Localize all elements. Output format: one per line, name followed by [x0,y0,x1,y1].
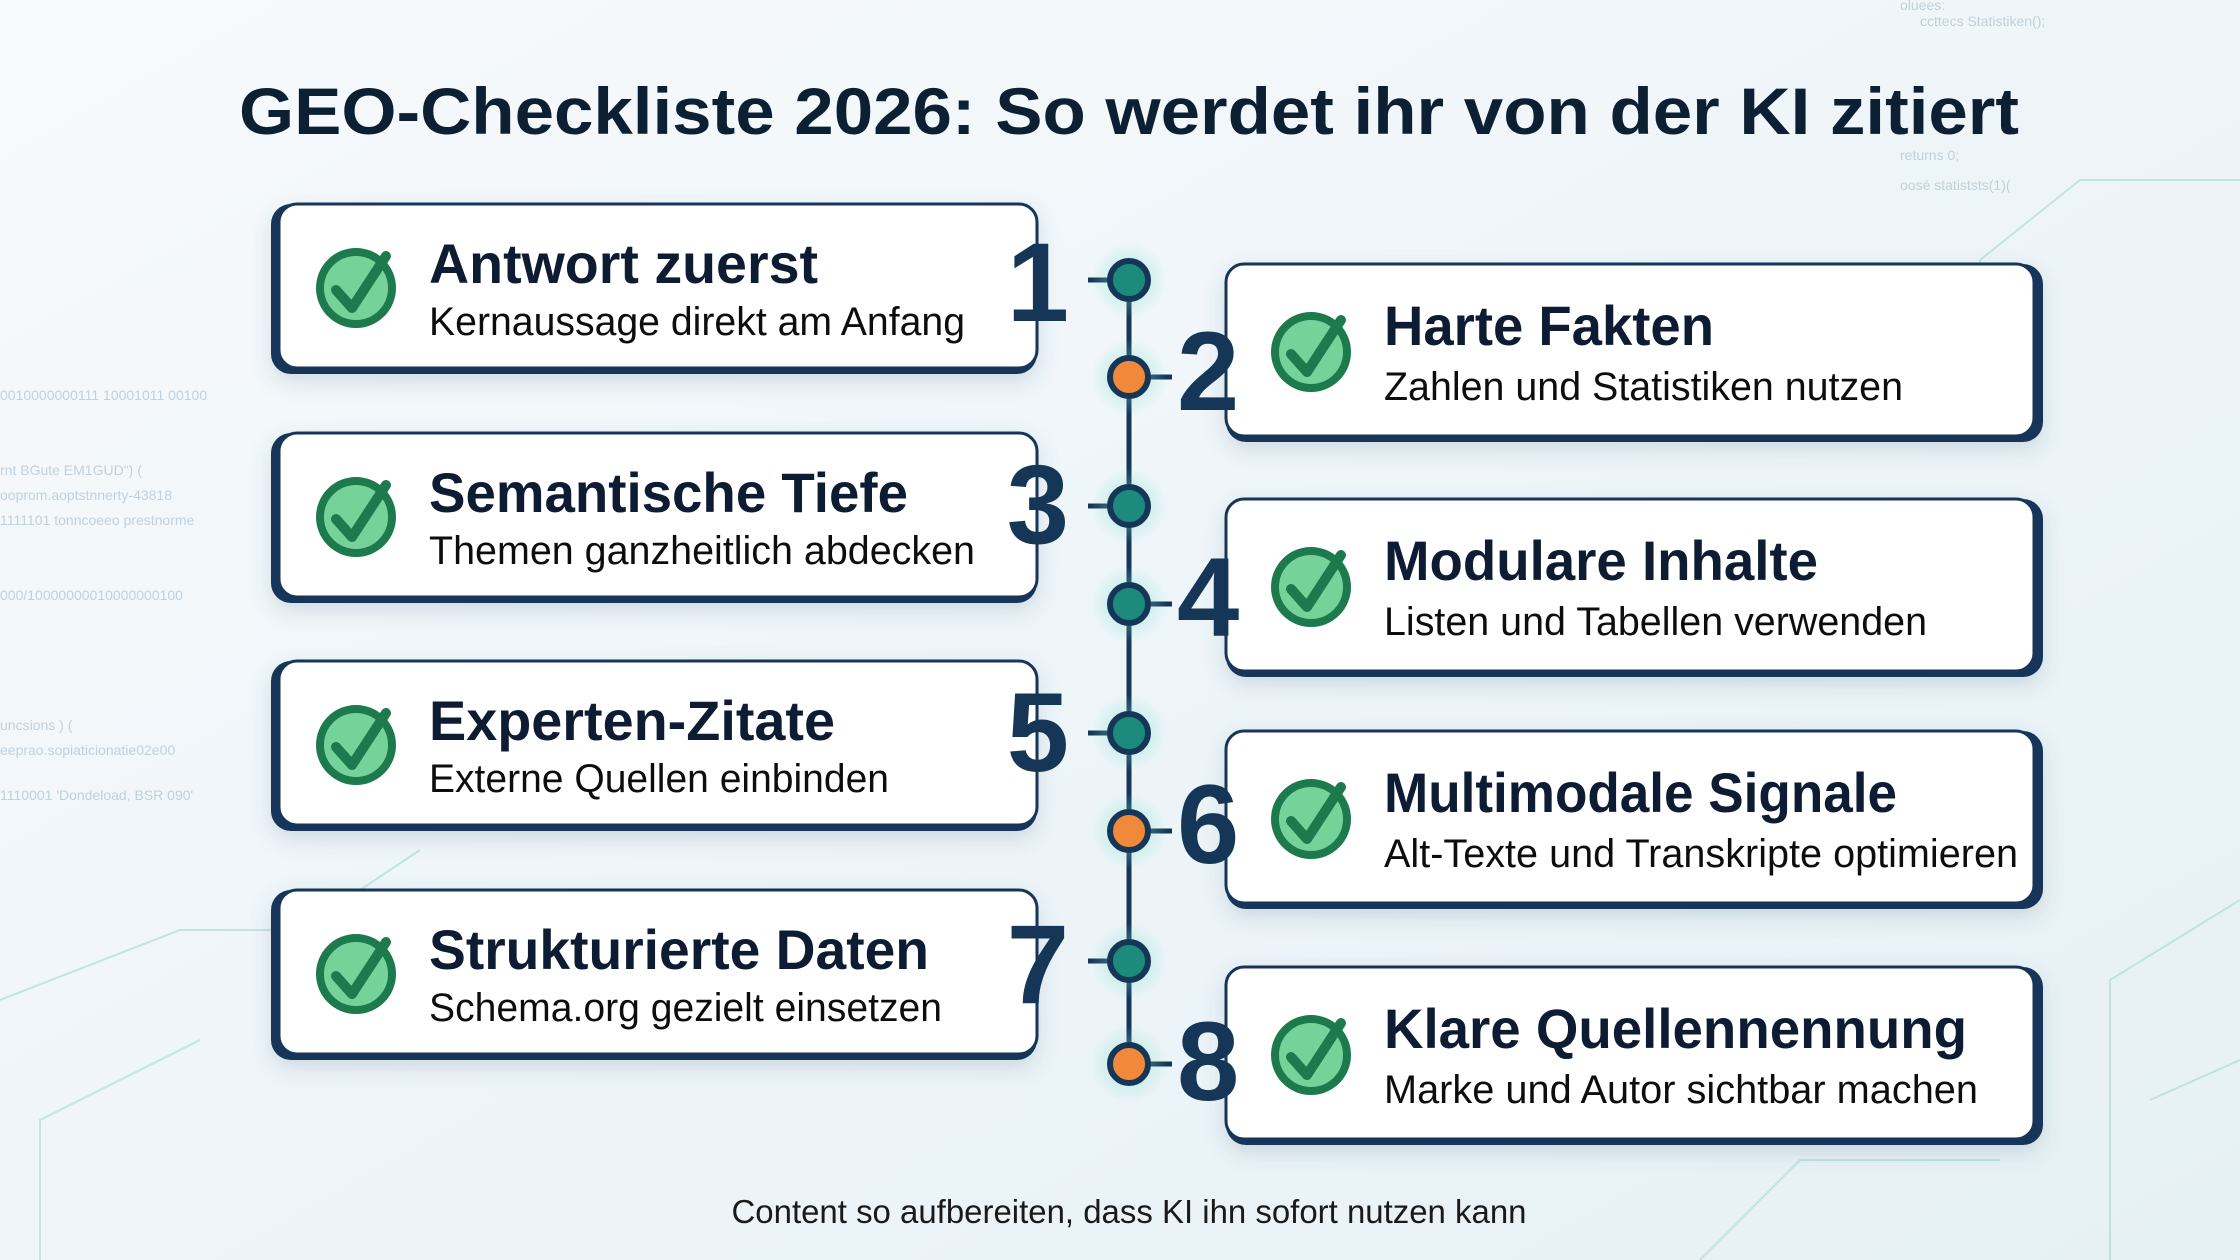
number 3: 3 [1007,442,1069,567]
number 8: 8 [1177,999,1239,1124]
number 6: 6 [1177,762,1239,887]
text 5: Externe Quellen einbinden [429,757,889,801]
node 7 [1091,923,1167,999]
card 3 [271,433,1037,603]
text: rnt BGute EM1GUD") ( [0,462,142,478]
text 8: Klare Quellennennung [1384,997,1967,1060]
text: 000/10000000010000000100 [0,587,183,603]
node 3 [1091,468,1167,544]
card 8 [1226,967,2043,1145]
text 1: Antwort zuerst [429,232,818,295]
icon: check 1 [320,252,392,324]
text: eeprao.sopiaticionatie02e00 [0,742,175,758]
icon: check 4 [1275,551,1347,623]
number 2: 2 [1177,309,1239,434]
text 4: Listen und Tabellen verwenden [1384,600,1927,644]
text 1: Kernaussage direkt am Anfang [429,300,965,344]
title: GEO-Checkliste 2026: So werdet ihr von der KI zitiert [239,74,2019,148]
text 1 [429,232,965,344]
number 7: 7 [1007,902,1069,1027]
icon: check 8 [1275,1019,1347,1091]
timeline [1088,242,1172,1102]
node 6 [1091,793,1167,869]
text 8 [1384,997,1978,1112]
icon: check 6 [1275,783,1347,855]
node 8 [1091,1026,1167,1102]
icon: check 3 [320,481,392,553]
number 5: 5 [1007,670,1069,795]
node 5 [1091,695,1167,771]
card 1 [271,204,1037,374]
text 8: Marke und Autor sichtbar machen [1384,1068,1978,1112]
text: ooprom.aoptstnnerty-43818 [0,487,172,503]
text: ccttecs Statistiken(); [1920,13,2045,29]
card 2 [1226,264,2043,442]
icon: check 5 [320,709,392,781]
node 1 [1091,242,1167,318]
card 5 [271,661,1037,831]
text 4 [1384,529,1927,644]
footer text: Content so aufbereiten, dass KI ihn sofort nutzen kann [732,1193,1526,1230]
text: uncsions ) ( [0,717,73,733]
text 3: Semantische Tiefe [429,461,908,524]
text 6 [1384,761,2018,876]
text 2 [1384,294,1903,409]
text 2: Zahlen und Statistiken nutzen [1384,365,1903,409]
text 6: Alt-Texte und Transkripte optimieren [1384,832,2018,876]
text 6: Multimodale Signale [1384,761,1897,824]
text: returns 0; [1900,147,1959,163]
text: 1110001 'Dondeload, BSR 090' [0,787,193,803]
text 3 [429,461,975,573]
text: 0010000000111 10001011 00100 [0,387,207,403]
node 4 [1091,566,1167,642]
card 6 [1226,731,2043,909]
text 2: Harte Fakten [1384,294,1714,357]
text 7: Schema.org gezielt einsetzen [429,986,942,1030]
card 7 [271,890,1037,1060]
node 2 [1091,339,1167,415]
text 5 [429,689,889,801]
text: 1111101 tonncoeeo prestnorme [0,512,195,528]
text 3: Themen ganzheitlich abdecken [429,529,975,573]
text 5: Experten-Zitate [429,689,835,752]
number 1: 1 [1007,220,1069,345]
text 7: Strukturierte Daten [429,918,929,981]
icon: check 2 [1275,316,1347,388]
text 4: Modulare Inhalte [1384,529,1818,592]
icon: check 7 [320,938,392,1010]
number 4: 4 [1177,535,1239,660]
text: oosé statiststs(1)( [1900,177,2011,193]
card 4 [1226,499,2043,677]
text 7 [429,918,942,1030]
